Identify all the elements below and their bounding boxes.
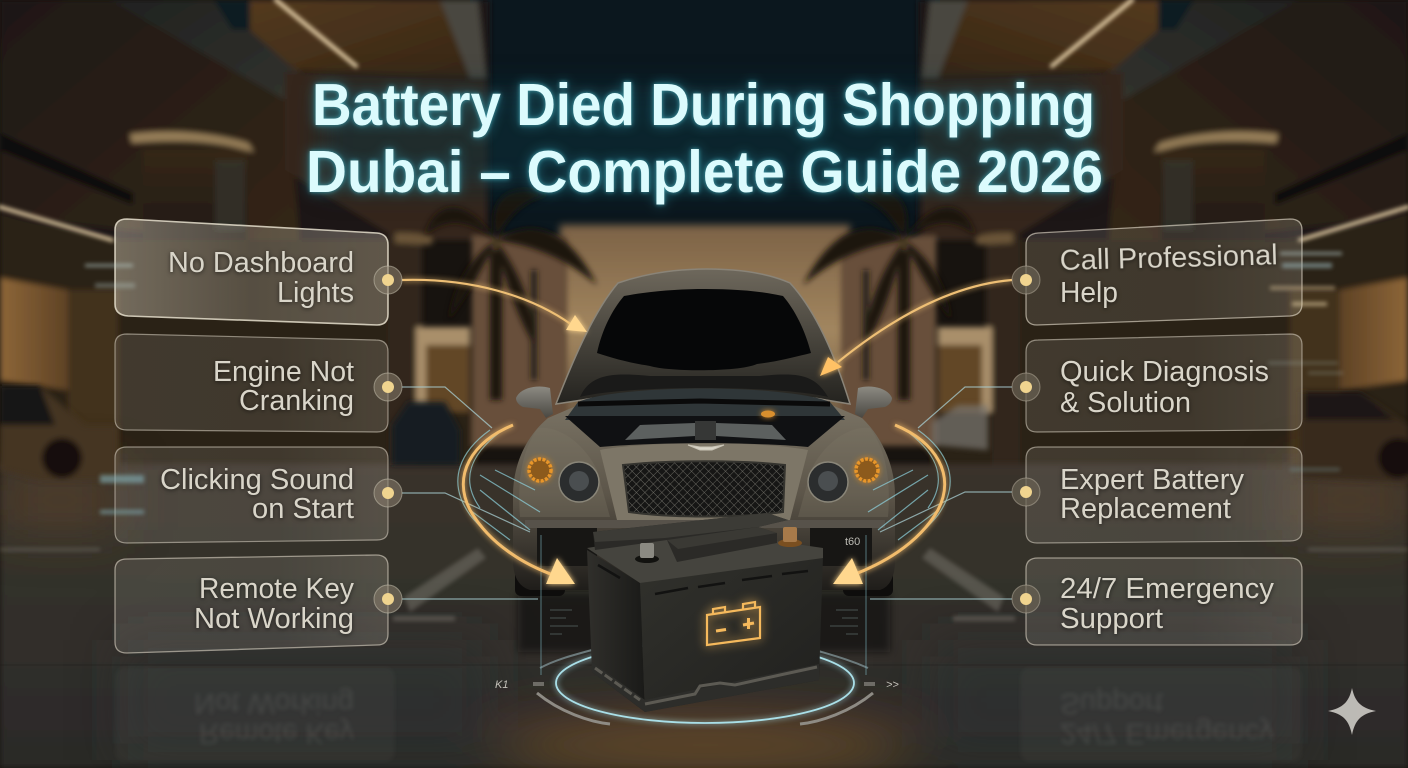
- car reflection: [518, 592, 890, 652]
- panel: Remote Key Not Working: [115, 555, 402, 653]
- connector lines right: [870, 387, 1012, 599]
- panel: 24/7 Emergency Support: [1012, 558, 1302, 645]
- panel: Quick Diagnosis and Solution: Quick Diagnosis: [1060, 356, 1269, 388]
- engine bay: [565, 416, 845, 447]
- floor reflection of right panel: 24/7 Emergency: [1060, 717, 1275, 749]
- wipers: [578, 401, 830, 404]
- right amber indicator: [856, 459, 878, 481]
- dark teal haze behind title: [320, 85, 1090, 190]
- panel: Clicking Sound on Start: [115, 447, 402, 543]
- positive terminal: [778, 527, 802, 547]
- floor horizon line: [0, 664, 1408, 666]
- floor reflection of left panel: Not Working: [194, 687, 354, 719]
- floor perspective markings: [0, 548, 1408, 621]
- night sky opening: [470, 0, 940, 240]
- panel: Engine Not Cranking: [115, 334, 402, 432]
- title: Dubai – Complete Guide 2026: [306, 139, 1103, 205]
- panel: Remote Key Not Working: Remote Key: [199, 573, 354, 605]
- panel: Engine Not Cranking: Cranking: [239, 385, 354, 417]
- holographic side frames and readouts: [541, 535, 866, 675]
- panel: 24/7 Emergency Support: Support: [1060, 603, 1163, 635]
- panel: Quick Diagnosis and Solution: & Solution: [1060, 387, 1191, 419]
- bonnet front: [600, 443, 808, 520]
- engine covers: [625, 410, 786, 440]
- panel: Expert Battery Replacement: Replacement: [1060, 493, 1231, 525]
- swirl light trails: [458, 430, 950, 572]
- car with open hood: [513, 269, 895, 652]
- palm trees: [425, 189, 975, 400]
- battery top plate: [587, 530, 823, 583]
- panel: Remote Key Not Working: Not Working: [194, 603, 354, 635]
- negative terminal: [635, 543, 659, 563]
- panel: Clicking Sound on Start: Clicking Sound: [160, 464, 354, 496]
- gold arrow: top right: [820, 280, 1012, 376]
- hood underside: [597, 289, 811, 370]
- battery left face: [587, 550, 645, 712]
- hud marks: K1: [495, 679, 508, 691]
- panel: Expert Battery Replacement: Expert Battery: [1060, 464, 1244, 496]
- grille: [623, 461, 785, 516]
- car body: [513, 400, 895, 590]
- battery front face: [640, 556, 823, 712]
- gold arrow: top left: [402, 280, 587, 332]
- open hood: [556, 269, 850, 404]
- panel: Call Professional Help: Call Professional: [1059, 239, 1278, 277]
- vent slots: [598, 565, 808, 594]
- panel: Call Professional Help: [1012, 219, 1302, 325]
- left amber indicator: [529, 459, 551, 481]
- panel: 24/7 Emergency Support: 24/7 Emergency: [1060, 573, 1275, 605]
- battery lid: [593, 513, 788, 562]
- right mirror: [855, 386, 892, 418]
- left fender highlight: [519, 428, 610, 517]
- left building side: [0, 0, 567, 472]
- left headlamp: [559, 462, 599, 502]
- gold arrow: lower right swirl: [833, 425, 945, 584]
- base rim: [592, 662, 819, 712]
- floor reflection of left panel: Remote Key: [199, 717, 354, 749]
- parked cars: [0, 386, 1408, 482]
- title: Battery Died During Shopping: [312, 72, 1095, 138]
- ceiling light strips: [0, 0, 1408, 240]
- panel: No Dashboard Lights: Lights: [277, 277, 354, 309]
- car battery: [587, 513, 823, 712]
- panel: Expert Battery Replacement: [1012, 447, 1302, 543]
- lower bumper: [525, 520, 885, 566]
- floor: [0, 464, 1408, 768]
- floor warm and teal glow: [0, 470, 1408, 768]
- panel: Clicking Sound on Start: on Start: [252, 493, 354, 525]
- centre back wall: [560, 225, 850, 460]
- hood frame shading: [580, 374, 828, 397]
- title: [306, 72, 1103, 205]
- hud marks: >>: [886, 679, 899, 691]
- connector lines left: [402, 387, 538, 599]
- floor reflection of right panel: Support: [1060, 687, 1163, 719]
- floor reflection of left panel: [115, 667, 395, 762]
- hud marks: [495, 679, 899, 691]
- gold arrow: lower left swirl: [463, 425, 575, 584]
- lower bumper: t60: [845, 536, 860, 548]
- holographic battery base ring: [537, 643, 873, 724]
- bentley wing badge: [688, 445, 724, 450]
- windshield: [565, 388, 845, 420]
- panel: Call Professional Help: Help: [1060, 277, 1118, 309]
- floor reflection of right panel: [1020, 667, 1302, 762]
- left mirror: [516, 386, 553, 418]
- tyres: [515, 560, 565, 596]
- glowing battery icon: [707, 602, 760, 645]
- panel: No Dashboard Lights: [115, 219, 402, 325]
- right fender highlight: [798, 428, 889, 517]
- right headlamp: [808, 462, 848, 502]
- right building side: [841, 0, 1408, 472]
- panel: Quick Diagnosis and Solution: [1012, 334, 1302, 432]
- panel: No Dashboard Lights: No Dashboard: [168, 247, 354, 279]
- motion streaks over panels: [85, 252, 1343, 514]
- panel: Engine Not Cranking: Engine Not: [213, 356, 354, 388]
- icon: sparkle watermark: [1328, 688, 1376, 735]
